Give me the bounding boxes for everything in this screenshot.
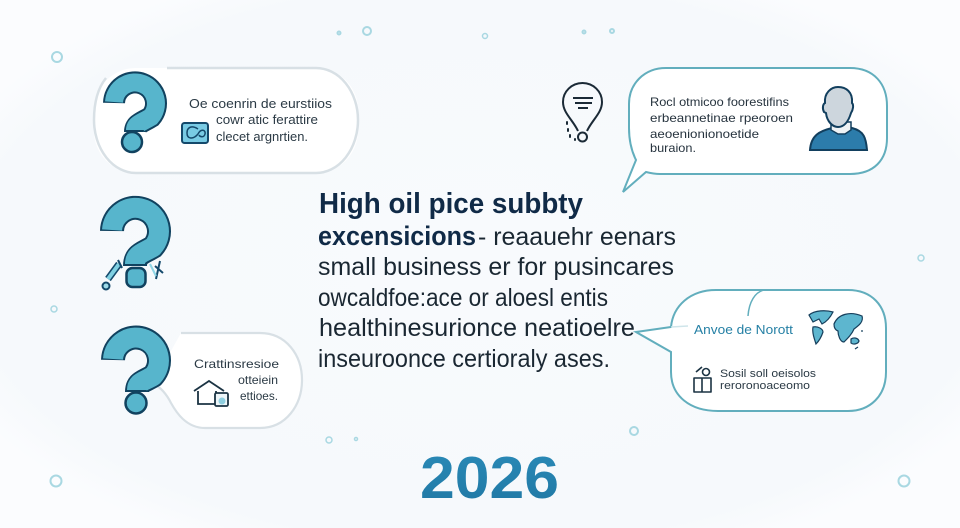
bubble 2 text: Rocl otmicoo foorestifins bbox=[650, 95, 789, 109]
title line 1: High oil pice subbty bbox=[319, 188, 583, 220]
bubble 3 text: ettioes. bbox=[240, 389, 278, 403]
bubble 4 text: Sosil soll oeisolos bbox=[720, 368, 817, 380]
icon: question mark 1 bbox=[114, 82, 156, 152]
title line 2: excensicions bbox=[318, 221, 476, 251]
bubble 4 text: reroronoaceomo bbox=[720, 380, 810, 392]
speech bubble 2 bbox=[623, 68, 887, 192]
icon: question mark 2 bbox=[112, 208, 159, 287]
body line 5: healthinesurionce neatioelre bbox=[319, 314, 635, 342]
icon: small card bbox=[182, 123, 208, 143]
panel: top right bubble bbox=[623, 68, 887, 192]
year: 2026 bbox=[420, 445, 559, 511]
icon: world map bbox=[809, 311, 862, 349]
bubble 1 text bbox=[189, 97, 332, 144]
icon: person at desk bbox=[694, 367, 711, 392]
panel: top left question bbox=[94, 68, 358, 173]
body line 6: inseuroonce certioraly ases. bbox=[318, 345, 610, 373]
panel: middle left question bbox=[102, 208, 163, 290]
panel: bottom left question bbox=[113, 333, 302, 428]
bubble 2 text: erbeannetinae rpeoroen bbox=[650, 111, 793, 125]
speech bubble 4 bbox=[636, 290, 886, 411]
icon: lightbulb bbox=[563, 83, 602, 142]
bubble 1 text: Oe coenrin de eurstiios bbox=[189, 97, 332, 111]
bubble 3 text: otteiein bbox=[238, 373, 278, 387]
speech bubble 3 bbox=[153, 333, 302, 428]
speech bubble 1 bbox=[94, 68, 358, 173]
bubble 1 text: clecet argnrtien. bbox=[216, 130, 308, 144]
title and body text bbox=[318, 188, 676, 373]
bubble 2 text: buraion. bbox=[650, 141, 696, 155]
bubble 3 text bbox=[194, 357, 279, 403]
bubble 3 text: Crattinsresioe bbox=[194, 357, 279, 371]
body line 4: owcaldfoe:ace or aloesl entis bbox=[318, 284, 608, 312]
icon: question mark 3 bbox=[113, 338, 159, 414]
bubble 4 heading: Anvoe de Norott bbox=[694, 323, 794, 337]
icon: broken tool bbox=[102, 260, 163, 290]
icon: person bbox=[810, 87, 867, 150]
bubble 1 text: cowr atic ferattire bbox=[216, 113, 318, 127]
panel: bottom right bubble bbox=[636, 290, 886, 411]
body line 2: - reaauehr eenars bbox=[478, 223, 676, 251]
bubble 2 text bbox=[650, 95, 793, 155]
bubble 2 text: aeoenionionoetide bbox=[650, 127, 759, 141]
decorative dots bbox=[50, 27, 924, 486]
icon: house bbox=[194, 381, 228, 406]
body line 3: small business er for pusincares bbox=[318, 253, 674, 281]
bubble 4 text bbox=[720, 368, 817, 392]
